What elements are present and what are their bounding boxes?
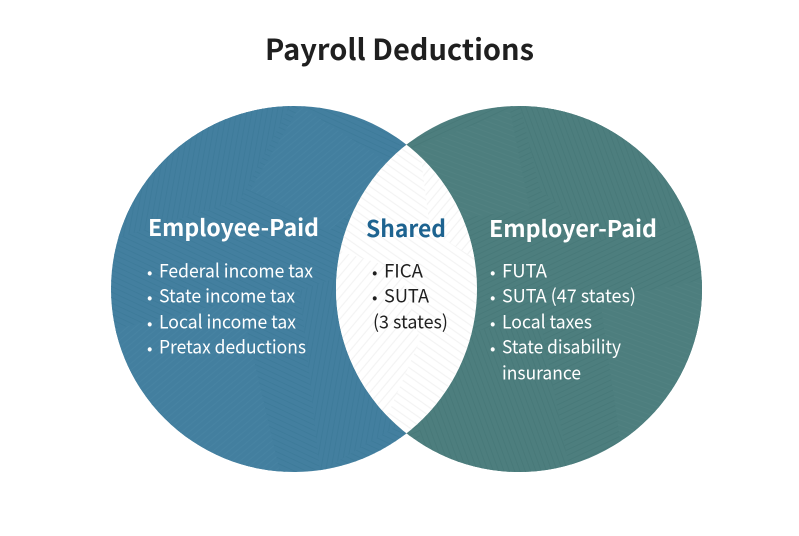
list: employee-paid deductions: • [147, 259, 152, 283]
list: employer-paid deductions: • [490, 310, 495, 334]
title: Payroll Deductions [265, 27, 534, 69]
list: shared deductions: • [372, 284, 377, 308]
panel: employer-paid circle [336, 106, 702, 472]
list: employee-paid deductions [147, 258, 313, 360]
list: employee-paid deductions: Local income tax [159, 308, 296, 334]
list: employee-paid deductions: Federal income tax [159, 258, 313, 284]
list: shared deductions: (3 states) [373, 308, 448, 334]
heading: employee-paid: Employee-Paid [148, 209, 319, 243]
venn diagram [111, 106, 702, 472]
list: employee-paid deductions: Pretax deductions [159, 334, 306, 360]
list: shared deductions: • [372, 259, 377, 283]
heading: shared: Shared [366, 210, 446, 244]
list: employer-paid deductions [490, 258, 636, 386]
list: employer-paid deductions: • [490, 335, 495, 359]
list: employer-paid deductions: • [490, 284, 495, 308]
panel: shared overlap [336, 145, 477, 433]
list: employer-paid deductions: FUTA [502, 258, 548, 284]
list: shared deductions: SUTA [384, 282, 430, 308]
list: employer-paid deductions: insurance [502, 360, 581, 386]
list: employer-paid deductions: SUTA (47 states) [502, 282, 636, 308]
list: shared deductions [372, 258, 448, 334]
list: employee-paid deductions: • [147, 284, 152, 308]
list: employer-paid deductions: State disability [502, 334, 621, 360]
list: employer-paid deductions: Local taxes [502, 308, 592, 334]
list: employer-paid deductions: • [490, 259, 495, 283]
list: employee-paid deductions: • [147, 310, 152, 334]
list: shared deductions: FICA [384, 258, 424, 284]
list: employee-paid deductions: State income tax [159, 282, 295, 308]
panel: employee-paid circle [111, 106, 406, 472]
heading: employer-paid: Employer-Paid [489, 210, 657, 244]
list: employee-paid deductions: • [147, 335, 152, 359]
